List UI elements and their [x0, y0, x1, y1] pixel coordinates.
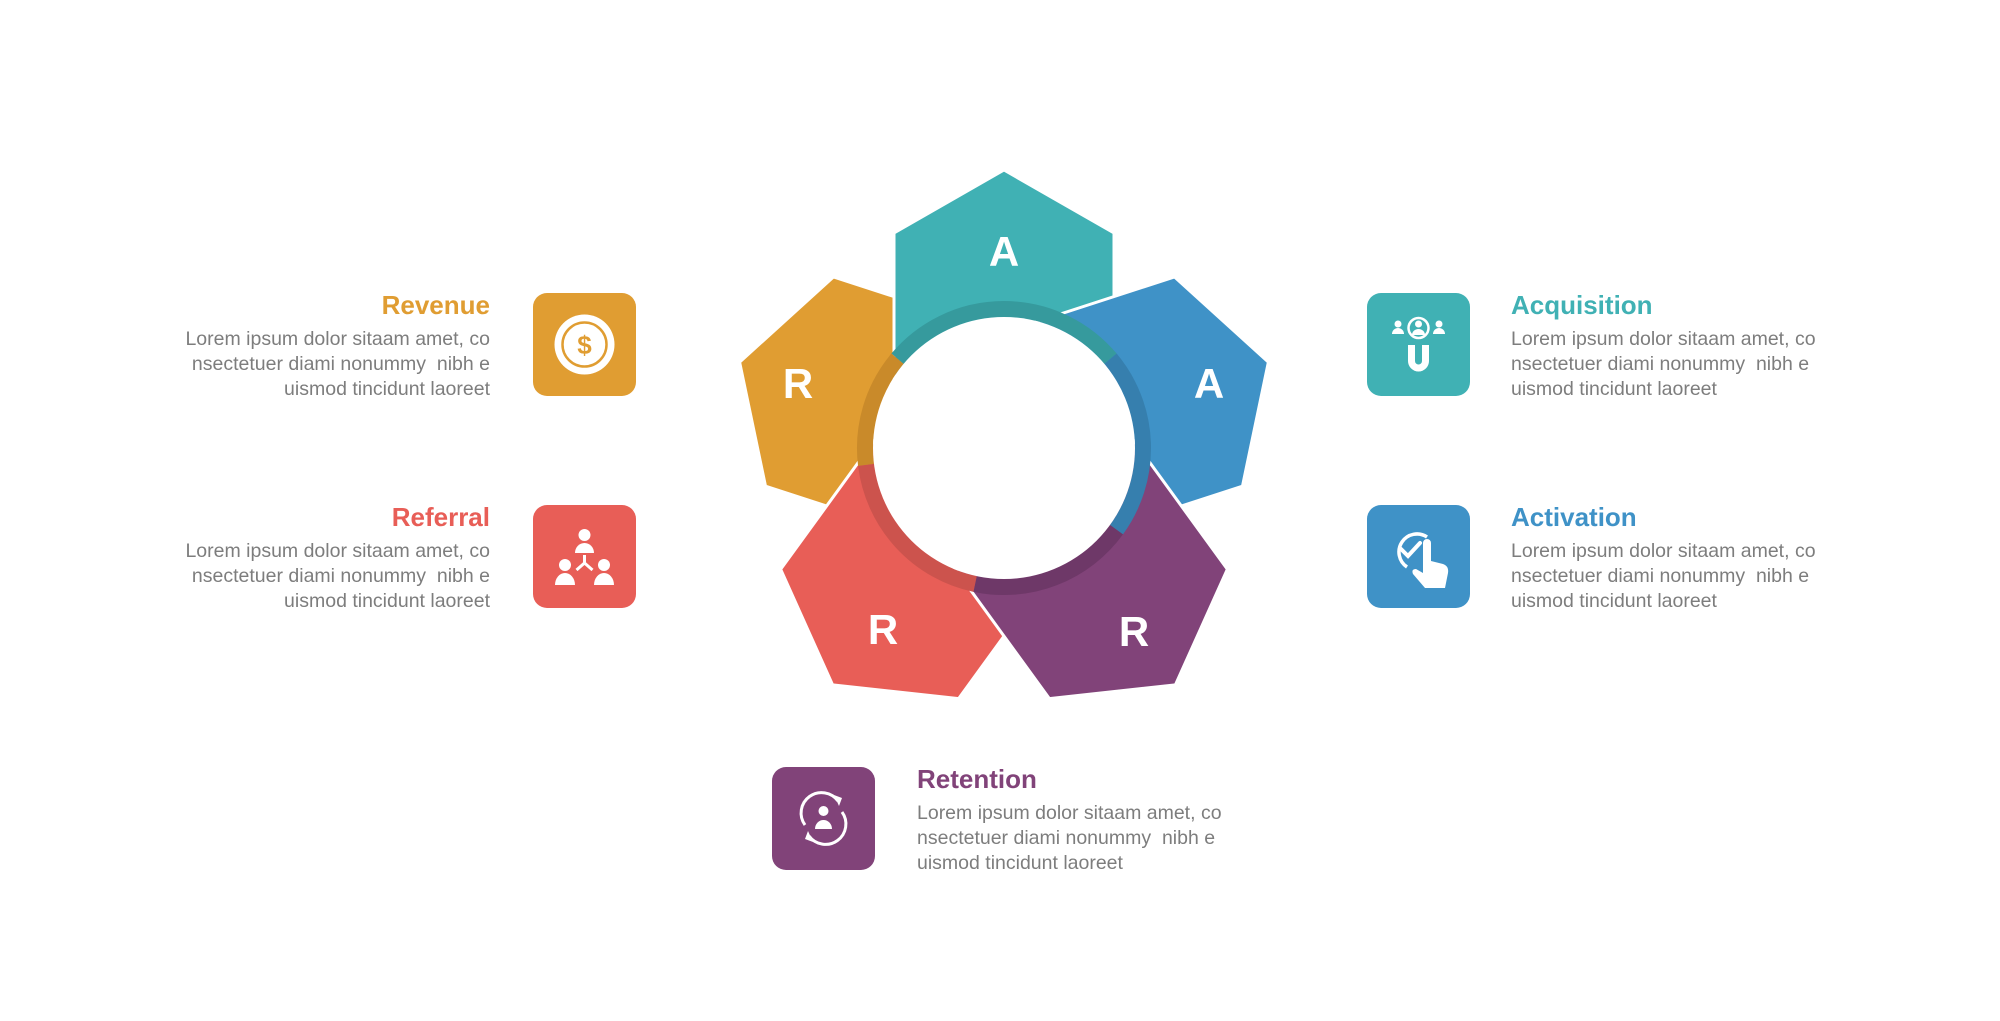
icon: click check: [1367, 505, 1470, 608]
text: Revenue body: [185, 328, 490, 400]
petal: orange R: [706, 257, 1038, 553]
text: Retention body: Lorem ipsum dolor sitaam amet, co: [917, 802, 1222, 824]
text: Retention body: uismod tincidunt laoreet: [917, 852, 1123, 874]
icon: retention cycle: [772, 767, 875, 870]
heading: Acquisition: Acquisition: [1511, 290, 1653, 320]
text: Revenue body: nsectetuer diami nonummy nibh e: [192, 353, 490, 375]
heading: Referral: Referral: [392, 502, 490, 532]
item: Revenue: [185, 290, 490, 400]
petal letters: R: [868, 606, 898, 653]
text: Retention body: nsectetuer diami nonummy nibh e: [917, 827, 1215, 849]
petal letters: R: [783, 360, 813, 407]
text: Acquisition body: nsectetuer diami nonummy nibh e: [1511, 353, 1809, 375]
text: Referral body: Lorem ipsum dolor sitaam amet, co: [185, 540, 490, 562]
text: Revenue body: Lorem ipsum dolor sitaam amet, co: [185, 328, 490, 350]
text: Referral body: nsectetuer diami nonummy nibh e: [192, 565, 490, 587]
petal: teal A: [894, 170, 1114, 448]
heading: Revenue: Revenue: [382, 290, 490, 320]
text: Referral body: [185, 540, 490, 612]
text: Revenue body: uismod tincidunt laoreet: [284, 378, 490, 400]
text: Activation body: [1511, 540, 1816, 612]
icon: magnet people: [1367, 293, 1470, 396]
text: Activation body: nsectetuer diami nonummy nibh e: [1511, 565, 1809, 587]
item: Activation: [1511, 502, 1816, 612]
text: Acquisition body: [1511, 328, 1816, 400]
icon: dollar coin: [533, 293, 636, 396]
text: Acquisition body: Lorem ipsum dolor sitaam amet, co: [1511, 328, 1816, 350]
icon: referral network: [533, 505, 636, 608]
heading: Activation: Activation: [1511, 502, 1637, 532]
text: Referral body: uismod tincidunt laoreet: [284, 590, 490, 612]
petal: blue A: [970, 257, 1302, 553]
text: Acquisition body: uismod tincidunt laoreet: [1511, 378, 1717, 400]
petal letters: A: [989, 228, 1019, 275]
petal: red R: [744, 395, 1085, 750]
petal letters: [783, 228, 1224, 655]
item: Retention: [917, 764, 1222, 874]
petal letters: R: [1119, 608, 1149, 655]
text: Activation body: uismod tincidunt laoreet: [1511, 590, 1717, 612]
icon: dollar coin: $: [577, 330, 592, 360]
inner ring: [865, 309, 1143, 587]
item: Referral: [185, 502, 490, 612]
petal letters: A: [1194, 360, 1224, 407]
text: Activation body: Lorem ipsum dolor sitaam amet, co: [1511, 540, 1816, 562]
heading: Retention: Retention: [917, 764, 1037, 794]
item: Acquisition: [1511, 290, 1816, 400]
text: Retention body: [917, 802, 1222, 874]
petal: purple R: [923, 395, 1264, 750]
